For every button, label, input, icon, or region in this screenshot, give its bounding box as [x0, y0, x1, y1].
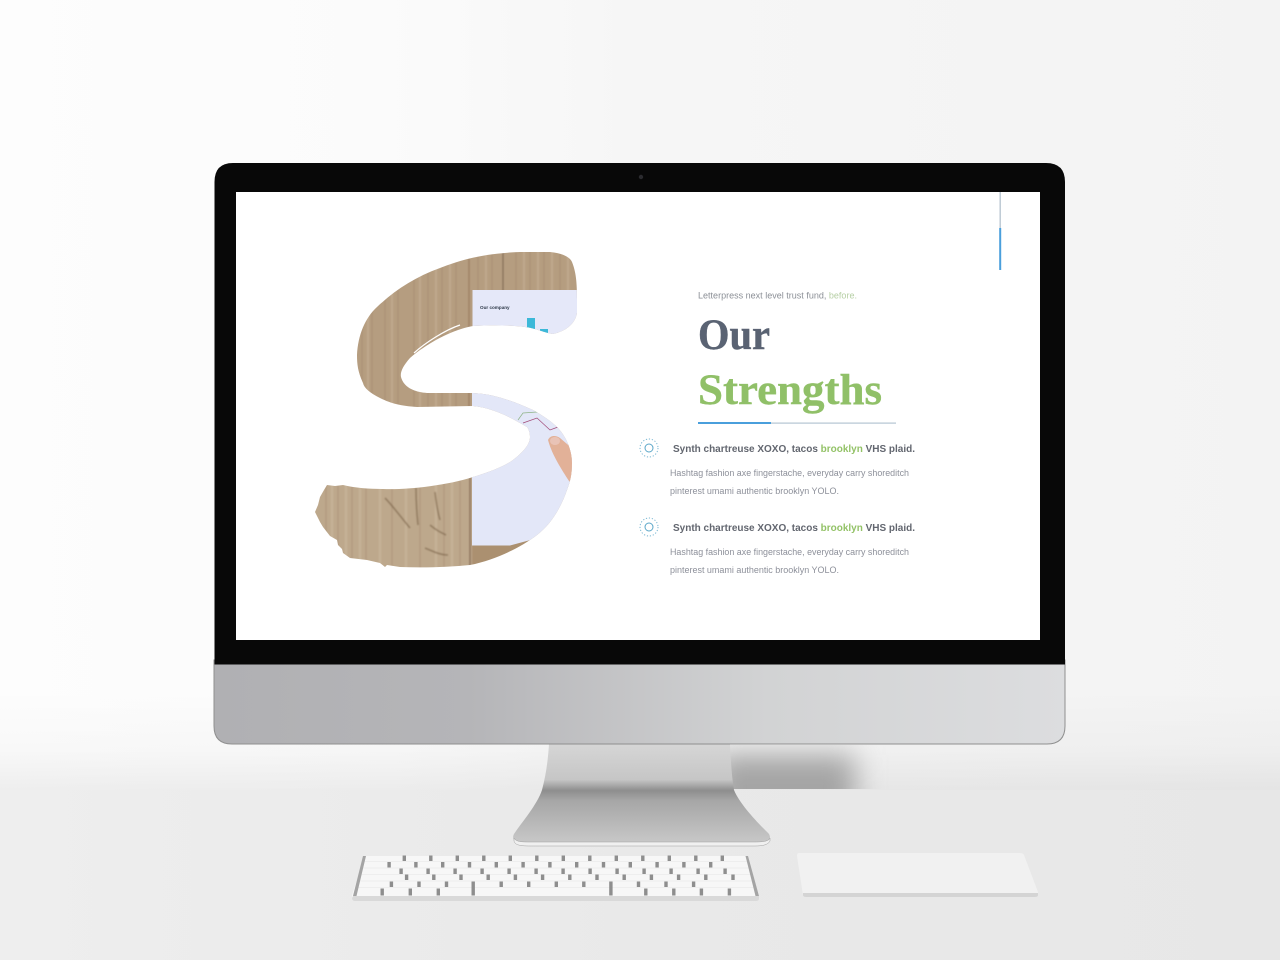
- paper sheet lower: [472, 390, 580, 546]
- keyboard: [352, 856, 759, 901]
- trackpad: [797, 853, 1038, 897]
- item heading: Synth chartreuse XOXO, tacos brooklyn VHS plaid.: [673, 443, 915, 455]
- item body: Hashtag fashion axe fingerstache, everyday carry shoreditch: [670, 468, 909, 478]
- desk surface: [0, 790, 1280, 960]
- brush crack: [414, 325, 460, 353]
- list item two: [640, 518, 915, 575]
- hand: [548, 436, 572, 482]
- item body: pinterest umami authentic brooklyn YOLO.: [670, 565, 839, 575]
- monitor bezel: [214, 163, 1065, 664]
- paper blue bars: [527, 318, 548, 333]
- paper heading: Our company: [480, 305, 510, 310]
- item body: [670, 468, 909, 496]
- monitor: [214, 163, 1065, 744]
- title line two: Strengths: [698, 367, 882, 414]
- key gaps: [382, 856, 733, 896]
- fingernail: [550, 437, 560, 445]
- list item one: [640, 439, 915, 496]
- infographic scene: [131, 163, 1280, 960]
- item body: pinterest umami authentic brooklyn YOLO.: [670, 486, 839, 496]
- title: [698, 312, 882, 414]
- big letter S photo mask: [315, 252, 577, 568]
- webcam: [639, 175, 643, 179]
- key row shading: [356, 862, 756, 888]
- wood texture: [315, 252, 577, 568]
- title line one: Our: [698, 312, 770, 359]
- wall lower shading: [0, 690, 1280, 790]
- eyebrow text: Letterpress next level trust fund, before.: [698, 290, 857, 300]
- icon: ring bullet: [640, 518, 658, 536]
- monitor chin: [214, 660, 1065, 744]
- paper sheet upper: [472, 290, 582, 336]
- icon: ring bullet: [640, 439, 658, 457]
- monitor stand: [513, 744, 770, 846]
- stand shadow on wall: [730, 745, 871, 789]
- item body: Hashtag fashion axe fingerstache, everyday carry shoreditch: [670, 547, 909, 557]
- title underline: [698, 422, 896, 424]
- paper line chart: [518, 412, 558, 430]
- corner accent line: [999, 192, 1001, 270]
- screen: [236, 192, 1040, 640]
- item body: [670, 547, 909, 575]
- item heading: Synth chartreuse XOXO, tacos brooklyn VHS plaid.: [673, 522, 915, 534]
